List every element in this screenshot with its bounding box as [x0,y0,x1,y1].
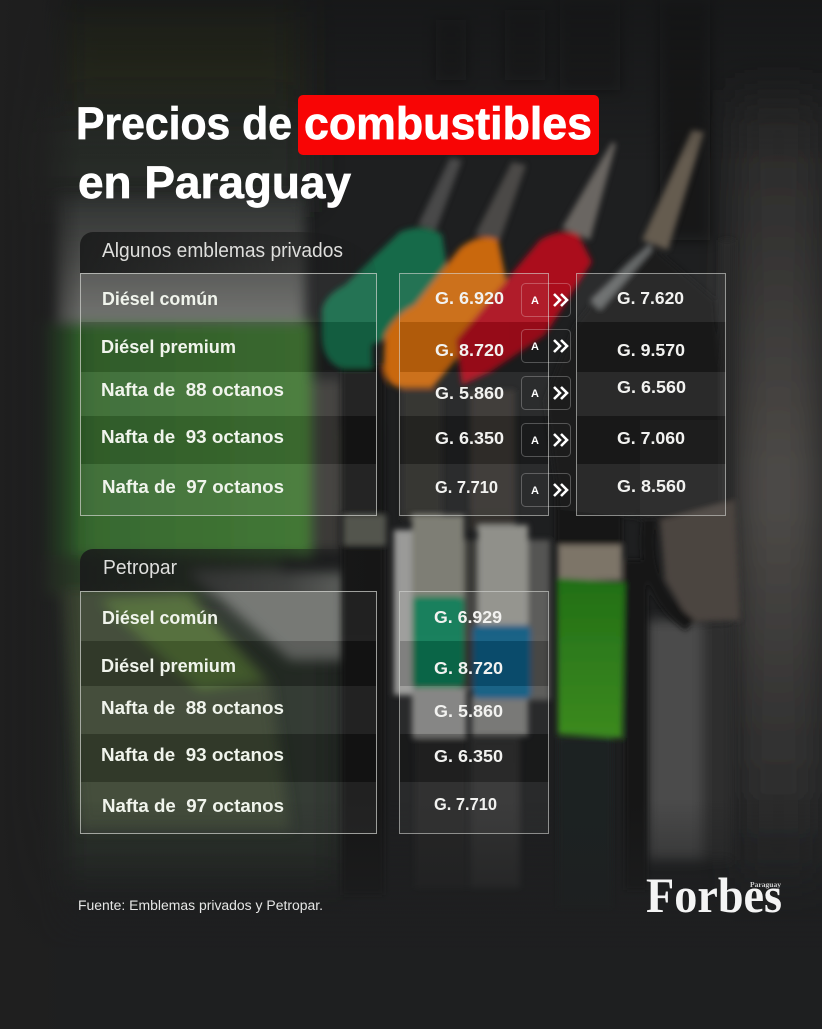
red handle [456,232,592,385]
table: new prices [576,274,726,516]
table: prices: G. 6.929 [434,607,502,627]
table: fuel names: Diésel común [102,288,218,309]
arrow badges: A [531,341,539,353]
collars [557,578,625,738]
table: prices: G. 5.860 [434,701,503,721]
table: new prices: G. 6.560 [617,377,686,397]
table: previous prices: G. 7.710 [435,477,498,497]
arrow badges: A [531,485,539,497]
table: fuel names: Diésel premium [101,655,236,676]
table: prices: G. 6.350 [434,746,503,766]
table: new prices: G. 8.560 [617,476,686,496]
table: fuel names [80,274,376,516]
table: previous prices [400,274,548,516]
title: en Paraguay [78,157,351,208]
green handle [322,228,448,368]
hoses [342,365,384,895]
table: fuel names: Nafta de 88 octanos [101,379,284,400]
table: prices [400,592,548,834]
dark handle [545,245,728,520]
table: fuel names: Diésel común [102,607,218,628]
row bands [81,273,726,515]
title: combustibles [304,98,592,149]
table: fuel names: Nafta de 97 octanos [102,476,284,497]
tab heading [80,232,376,273]
table: fuel names: Diésel premium [101,336,236,357]
panel: petropar [80,549,549,834]
grip highlights [590,243,652,310]
table: prices: G. 8.720 [434,658,503,678]
table: fuel names: Nafta de 93 octanos [101,744,284,765]
table: fuel names: Nafta de 97 octanos [102,795,284,816]
table: new prices: G. 9.570 [617,340,685,360]
trigger guard [660,500,740,622]
table: previous prices: G. 6.920 [435,288,504,308]
tab heading [80,549,376,591]
logo: Forbes Paraguay: Paraguay [750,880,781,889]
arrow badges: A [531,295,539,307]
table: previous prices: G. 8.720 [435,340,504,360]
arrow badges: A [531,435,539,447]
title: Precios de [76,98,292,149]
arrow badges: A [531,388,539,400]
table: new prices: G. 7.060 [617,428,685,448]
tab heading: Algunos emblemas privados [102,240,343,262]
tab heading: Petropar [103,557,177,579]
table: new prices: G. 7.620 [617,288,684,308]
source note: Fuente: Emblemas privados y Petropar. [78,898,323,913]
stems [418,158,462,230]
table: previous prices: G. 6.350 [435,428,504,448]
table: fuel names: Nafta de 88 octanos [101,697,284,718]
table: fuel names [80,592,376,834]
arrow badges [522,284,570,506]
logo: Forbes Paraguay: Forbes [646,867,782,923]
title highlight box [298,95,599,155]
table: previous prices: G. 5.860 [435,383,504,403]
panel: algunos emblemas privados [80,232,726,516]
orange handle [384,237,506,388]
row bands [81,591,549,833]
title [76,95,599,208]
table: prices: G. 7.710 [434,794,497,814]
table: fuel names: Nafta de 93 octanos [101,426,284,447]
